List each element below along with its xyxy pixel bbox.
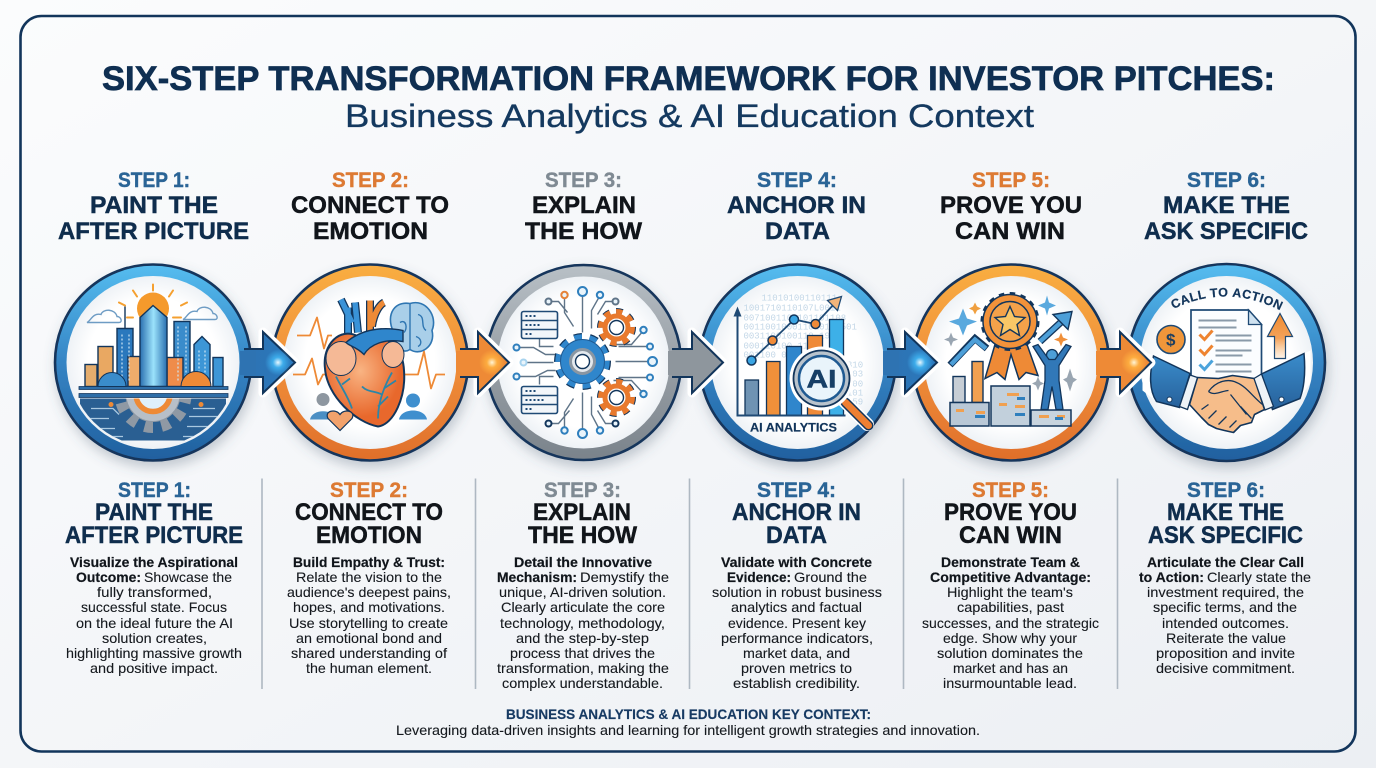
column: step 3 details bbox=[497, 479, 669, 691]
binary digits backdrop: 0031100100110 1903 bbox=[744, 332, 841, 342]
binary digits backdrop: 1103 bbox=[842, 370, 863, 380]
column: step 5 details: STEP 5: bbox=[972, 479, 1049, 502]
column: step 6 details: STEP 6: bbox=[1187, 479, 1265, 502]
icon circle: step 6 call to action handshake bbox=[1126, 262, 1334, 474]
top heading: step 6: STEP 6: bbox=[1187, 169, 1266, 192]
column: step 3 details: Demystify the bbox=[580, 569, 669, 585]
top heading: step 4: ANCHOR IN bbox=[727, 192, 866, 219]
column: step 6 details: to Action: bbox=[1139, 569, 1204, 585]
arrow: step 2 to step 3 bbox=[456, 332, 509, 393]
column: step 3 details: EXPLAIN bbox=[533, 499, 631, 526]
binary digits backdrop: 0071001100101101108 bbox=[744, 314, 846, 324]
column: step 2 details: STEP 2: bbox=[330, 479, 408, 502]
column: step 1 details: Showcase the bbox=[144, 569, 232, 585]
column: step 5 details: insurmountable lead. bbox=[943, 675, 1077, 691]
column: step 4 details: Ground the bbox=[794, 569, 867, 585]
column: step 4 details: performance indicators, bbox=[721, 630, 873, 646]
column: step 5 details: Demonstrate Team & bbox=[941, 554, 1080, 570]
top heading: step 5 bbox=[940, 169, 1082, 245]
column: step 5 details: Highlight the team's bbox=[947, 584, 1073, 600]
column: step 1 details: on the ideal future the AI bbox=[76, 615, 233, 631]
title: SIX-STEP TRANSFORMATION FRAMEWORK FOR INVESTOR PITCHES: bbox=[102, 60, 1275, 98]
binary digits backdrop bbox=[744, 294, 863, 408]
icon circle: step 6 call to action handshake: $ bbox=[1166, 330, 1176, 350]
column: step 3 details: STEP 3: bbox=[544, 479, 621, 502]
icon circle: step 4 AI analytics bbox=[700, 264, 896, 460]
top heading: step 3: THE HOW bbox=[525, 218, 643, 245]
column: step 2 details: shared understanding of bbox=[291, 645, 447, 661]
column: step 1 details: Outcome: bbox=[76, 569, 141, 585]
arrow: step 1 to step 2 bbox=[240, 332, 295, 393]
column: step 4 details: evidence. Present key bbox=[728, 615, 866, 631]
top heading: step 2: EMOTION bbox=[313, 218, 428, 245]
column: step 6 details: proposition and invite bbox=[1156, 645, 1295, 661]
column: step 3 details: Mechanism: bbox=[497, 569, 577, 585]
column: step 4 details: ANCHOR IN bbox=[732, 499, 861, 526]
top heading: step 5: PROVE YOU bbox=[940, 192, 1082, 219]
column: step 1 details: and positive impact. bbox=[90, 660, 218, 676]
top heading: step 2: CONNECT TO bbox=[291, 192, 449, 219]
column: step 6 details: Clearly state the bbox=[1207, 569, 1311, 585]
column: step 1 details: successful state. Focus bbox=[81, 599, 227, 615]
top heading: step 4: STEP 4: bbox=[757, 169, 837, 192]
column: step 4 details: proven metrics to bbox=[741, 660, 852, 676]
arrow: step 5 to step 6 bbox=[1096, 332, 1151, 393]
binary digits backdrop: 1100 bbox=[842, 380, 863, 390]
column: step 3 details: and the step-by-step bbox=[516, 630, 649, 646]
subtitle: Business Analytics & AI Education Context bbox=[345, 98, 1034, 134]
column: step 3 details: Clearly articulate the core bbox=[501, 599, 665, 615]
footer context bbox=[396, 706, 980, 738]
top heading: step 1: STEP 1: bbox=[118, 169, 190, 192]
column: step 6 details: intended outcomes. bbox=[1162, 615, 1289, 631]
column: step 6 details: specific terms, and the bbox=[1153, 599, 1297, 615]
column: step 4 details: DATA bbox=[766, 522, 827, 549]
column: step 4 details bbox=[712, 479, 882, 691]
top heading: step 6 bbox=[1144, 169, 1308, 245]
binary digits backdrop: 0011001000110101 1501 bbox=[744, 322, 857, 332]
column: step 4 details: market data, and bbox=[743, 645, 850, 661]
column: step 3 details: transformation, making the bbox=[497, 660, 669, 676]
binary digits backdrop: 0310 bbox=[842, 360, 863, 370]
column: step 2 details: the human element. bbox=[306, 660, 432, 676]
icon circle: step 5 win medal and podium bbox=[913, 264, 1109, 460]
binary digits backdrop: 11010100110111 bbox=[762, 294, 837, 304]
column: step 4 details: establish credibility. bbox=[733, 675, 860, 691]
binary digits backdrop: 1259 bbox=[842, 398, 863, 408]
top heading: step 4 bbox=[727, 169, 866, 245]
column: step 3 details: THE HOW bbox=[528, 522, 638, 549]
top heading: step 2 bbox=[291, 169, 449, 245]
column: step 6 details: decisive commitment. bbox=[1156, 660, 1295, 676]
column: step 5 details: Competitive Advantage: bbox=[930, 569, 1091, 585]
column: step 1 details: fully transformed, bbox=[97, 584, 212, 600]
column: step 2 details: Use storytelling to create bbox=[289, 615, 448, 631]
top heading: step 6: MAKE THE bbox=[1163, 192, 1290, 219]
column: step 6 details: Articulate the Clear Call bbox=[1147, 554, 1304, 570]
column: step 2 details: hopes, and motivations. bbox=[293, 599, 445, 615]
column: step 4 details: analytics and factual bbox=[731, 599, 862, 615]
top heading: step 5: STEP 5: bbox=[972, 169, 1050, 192]
icon circle: step 4 AI analytics: AI bbox=[806, 366, 836, 394]
top heading: step 1: PAINT THE bbox=[90, 192, 218, 219]
column: step 4 details: Evidence: bbox=[727, 569, 791, 585]
column: step 2 details: Build Empathy & Trust: bbox=[293, 554, 445, 570]
binary digits backdrop: 000110100 1101 bbox=[744, 342, 819, 352]
arrow: step 4 to step 5 bbox=[883, 332, 937, 393]
column: step 3 details: Detail the Innovative bbox=[514, 554, 652, 570]
column: step 5 details: edge. Show why your bbox=[943, 630, 1077, 646]
arrow: step 3 to step 4 bbox=[668, 332, 723, 393]
column: step 5 details: PROVE YOU bbox=[944, 499, 1077, 526]
binary digits backdrop: 1101 bbox=[842, 388, 863, 398]
icon circle: step 2 heart and brain bbox=[272, 264, 468, 460]
column: step 2 details bbox=[287, 479, 451, 676]
top heading: step 4: DATA bbox=[765, 218, 830, 245]
column: step 5 details bbox=[922, 479, 1099, 691]
icon circle: step 3 technology mechanism bbox=[486, 265, 681, 460]
column: step 3 details: complex understandable. bbox=[502, 675, 663, 691]
footer context: Leveraging data-driven insights and learning for intelligent growth strategies and innovation. bbox=[396, 722, 980, 738]
column: step 1 details: STEP 1: bbox=[118, 479, 191, 502]
column: step 5 details: CAN WIN bbox=[959, 522, 1062, 549]
top heading: step 6: ASK SPECIFIC bbox=[1144, 218, 1308, 245]
column: step 5 details: market and has an bbox=[953, 660, 1068, 676]
curved call to action label: CALL TO ACTION bbox=[1171, 288, 1284, 310]
column: step 4 details: STEP 4: bbox=[757, 479, 836, 502]
top heading: step 3: STEP 3: bbox=[545, 169, 622, 192]
icon circle: step 4 AI analytics: AI ANALYTICS bbox=[750, 420, 837, 434]
column: step 4 details: solution in robust business bbox=[712, 584, 882, 600]
column: step 2 details: Relate the vision to the bbox=[296, 569, 442, 585]
binary digits backdrop: 001100 0900 bbox=[744, 350, 803, 360]
column: step 2 details: EMOTION bbox=[316, 522, 422, 549]
column: step 6 details: ASK SPECIFIC bbox=[1148, 522, 1303, 549]
column: step 5 details: solution dominates the bbox=[937, 645, 1083, 661]
column: step 1 details: AFTER PICTURE bbox=[65, 522, 243, 549]
top heading: step 2: STEP 2: bbox=[332, 169, 409, 192]
column: step 1 details: Visualize the Aspirational bbox=[70, 554, 238, 570]
column: step 6 details bbox=[1139, 479, 1311, 676]
column: step 1 details bbox=[65, 479, 243, 676]
column: step 3 details: unique, AI-driven solution. bbox=[499, 584, 666, 600]
column: step 1 details: PAINT THE bbox=[95, 499, 213, 526]
column: step 4 details: Validate with Concrete bbox=[721, 554, 872, 570]
top heading: step 1: AFTER PICTURE bbox=[58, 218, 249, 245]
column: step 6 details: Reiterate the value bbox=[1166, 630, 1286, 646]
column: step 2 details: an emotional bond and bbox=[296, 630, 442, 646]
column: step 3 details: process that drives the bbox=[510, 645, 655, 661]
column: step 1 details: solution creates, bbox=[102, 630, 207, 646]
top heading: step 3: EXPLAIN bbox=[532, 192, 636, 219]
top heading: step 1 bbox=[58, 169, 249, 245]
icon circle: step 1 city skyline bbox=[55, 264, 251, 460]
column: step 1 details: highlighting massive growth bbox=[66, 645, 242, 661]
column: step 6 details: investment required, the bbox=[1147, 584, 1304, 600]
column: step 5 details: capabilities, past bbox=[957, 599, 1064, 615]
top heading: step 3 bbox=[525, 169, 643, 245]
column: step 3 details: technology, methodology, bbox=[500, 615, 665, 631]
binary digits backdrop: 1001710110107L0011 bbox=[744, 304, 841, 314]
column: step 5 details: successes, and the strategic bbox=[922, 615, 1099, 631]
column: step 2 details: CONNECT TO bbox=[295, 499, 443, 526]
column: step 6 details: MAKE THE bbox=[1167, 499, 1284, 526]
column: step 2 details: audience's deepest pains, bbox=[287, 584, 451, 600]
footer context: BUSINESS ANALYTICS & AI EDUCATION KEY CONTEXT: bbox=[506, 706, 871, 722]
top heading: step 5: CAN WIN bbox=[955, 218, 1065, 245]
